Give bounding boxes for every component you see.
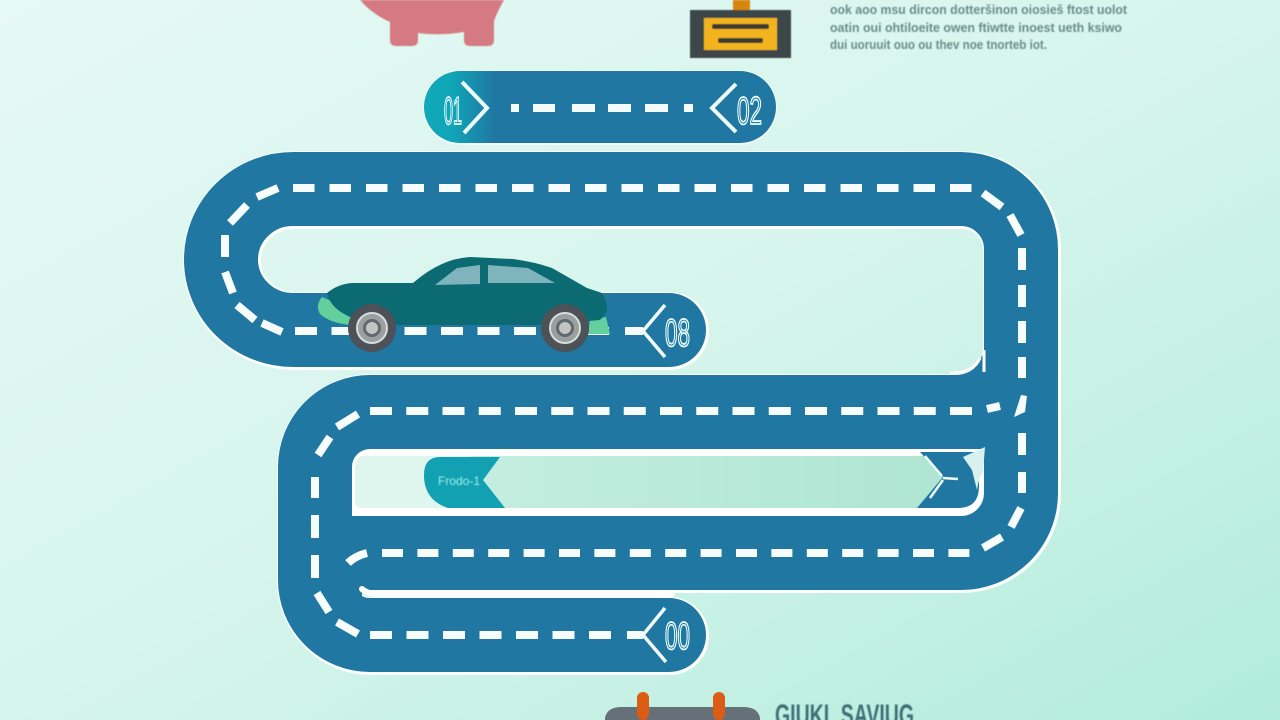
icon: piggy bank bbox=[360, 0, 504, 46]
car windows bbox=[435, 265, 555, 285]
step marker: 03: 08 bbox=[665, 312, 690, 355]
icon: car bbox=[318, 257, 610, 352]
road: winding blue route bbox=[221, 189, 1021, 635]
car body bbox=[327, 257, 607, 325]
road: corner fill and white seam between lower lanes bbox=[350, 350, 985, 600]
step marker: 04 bbox=[627, 608, 690, 662]
road: dashed centre lines bbox=[225, 188, 1022, 635]
road: white outline bbox=[222, 190, 1022, 636]
step marker: teal lane start bbox=[424, 457, 505, 508]
step marker: lane end chevron bbox=[917, 447, 985, 508]
step marker: teal lane start: Frodo-1 bbox=[438, 474, 480, 488]
icon: road sign bbox=[690, 0, 791, 58]
start pill: 01 to 02: 01 bbox=[444, 90, 462, 133]
step marker: 04: 00 bbox=[665, 615, 690, 658]
text block: description: ook aoo msu dircon dotteršinon oiosieš ftost uolot bbox=[830, 3, 1128, 17]
car wheel: front bbox=[541, 304, 589, 352]
car wheel: rear bbox=[348, 304, 396, 352]
panel: mint inner lane bbox=[340, 449, 985, 516]
start pill: 01 to 02: 02 bbox=[737, 90, 762, 133]
icon: calendar bbox=[605, 692, 760, 720]
text block: description: oatin oui ohtiloeite owen ftiwtte inoest ueth ksiwo bbox=[830, 21, 1122, 35]
step marker: 03 bbox=[625, 305, 690, 357]
icon: corner mark on road junction bbox=[1014, 395, 1027, 417]
start pill: 01 to 02 bbox=[423, 70, 777, 145]
car lights bbox=[318, 297, 610, 334]
text block: description bbox=[830, 3, 1128, 52]
text block: description: dui uoruuit ouo ou thev noe tnorteb iot. bbox=[830, 38, 1047, 52]
